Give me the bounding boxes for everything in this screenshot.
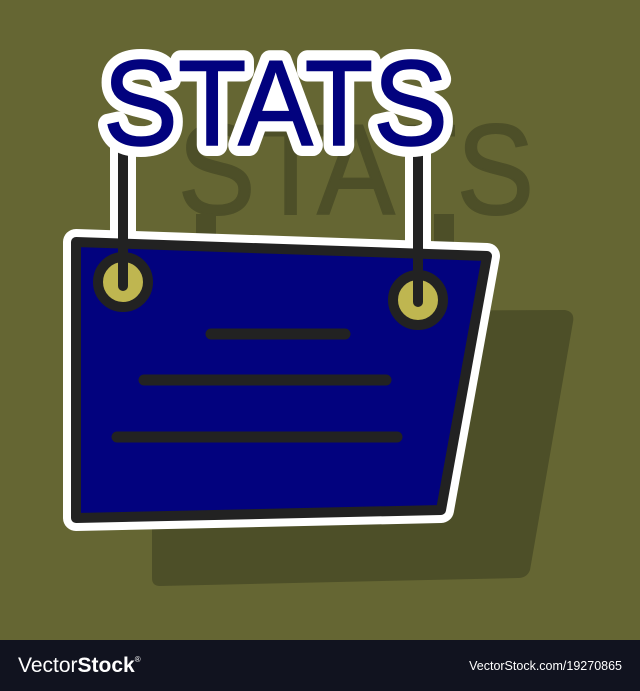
title: STATS (103, 35, 448, 171)
white outline (76, 140, 487, 518)
footer url: VectorStock.com/19270865 (469, 659, 622, 673)
shadow: sign and title: STATS (178, 99, 534, 242)
hole left (98, 257, 148, 307)
text lines (117, 334, 397, 437)
title: STATS (103, 35, 448, 171)
board (76, 242, 487, 518)
footer logo: ® (135, 655, 141, 664)
strings (123, 148, 418, 302)
hanging sign (76, 140, 487, 518)
footer logo: VectorStock (18, 654, 135, 677)
hole right (393, 275, 443, 325)
footer bar (0, 640, 640, 691)
shadow: sign and title (152, 99, 573, 586)
